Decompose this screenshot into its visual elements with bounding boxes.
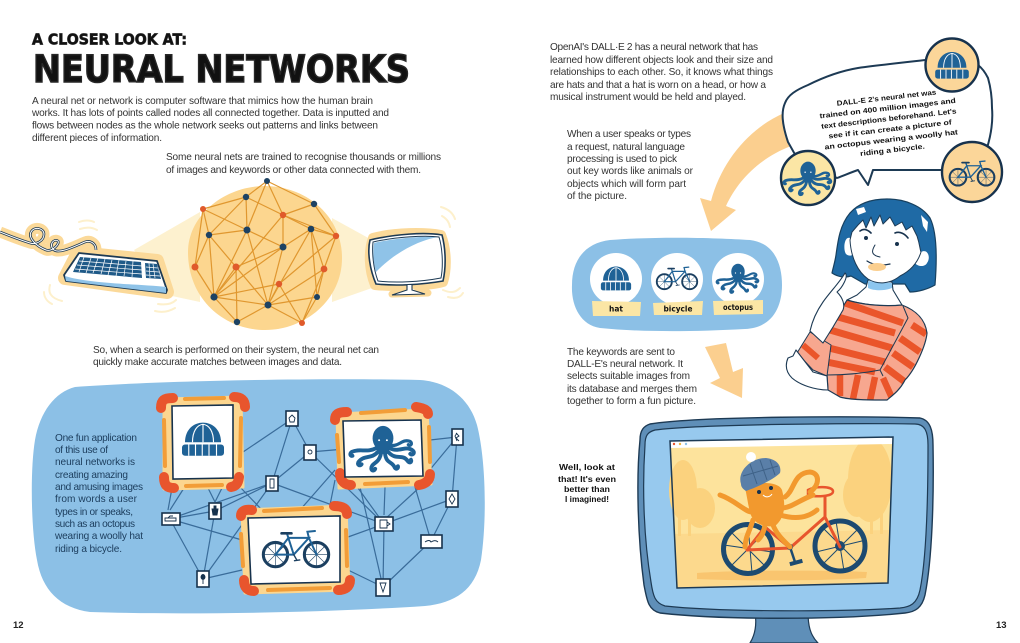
text block: fun application: such as an octopus <box>55 519 135 530</box>
bubble text: trained on 400 million images and <box>819 96 956 120</box>
speech bubble <box>781 38 1002 205</box>
hair <box>832 199 936 292</box>
text block: DALL-E 2 intro: are hats and that a hat is worn on a head, or how a <box>550 80 766 91</box>
panel: image network <box>32 379 485 613</box>
monitor body <box>638 417 933 618</box>
text block: fun application: neural networks is <box>55 457 135 468</box>
page number 13: 13 <box>996 620 1007 631</box>
illustration: big monitor <box>638 417 933 643</box>
text block: trained neural nets: of images and keywords or other data connected with them. <box>166 165 421 176</box>
text block: intro: A neural net or network is computer software that mimics how the human brain <box>32 96 373 107</box>
text block: keywords sent: The keywords are sent to <box>567 347 675 358</box>
panel: keywords <box>572 238 782 331</box>
bubble text <box>818 85 961 162</box>
text block: DALL-E 2 intro <box>550 42 773 103</box>
keyword: bicycle: bicycle <box>664 304 693 314</box>
bicycle frame <box>747 487 840 550</box>
text block: intro <box>31 96 389 144</box>
text block: trained neural nets: Some neural nets are trained to recognise thousands or millions <box>166 152 441 163</box>
icon: bicycle circle <box>942 142 1002 202</box>
text block: natural language processing: processing is used to pick <box>567 154 678 165</box>
text block: fun application <box>54 433 143 555</box>
frame: bicycle <box>241 506 350 593</box>
sweater <box>815 300 927 401</box>
neural net circle <box>188 178 342 330</box>
text block: keywords sent: selects suitable images from <box>567 371 690 382</box>
heading: a closer look at: A CLOSER LOOK AT: <box>32 30 187 48</box>
bubble text: text descriptions beforehand. Let's <box>821 106 957 131</box>
text block: intro: works. It has lots of points called nodes all connected together. Data is inputted and <box>31 108 389 119</box>
text block: DALL-E 2 intro: musical instrument would be held and played. <box>550 92 746 103</box>
light beams <box>134 212 372 302</box>
icon: hat circle <box>926 38 978 92</box>
text block: keywords sent: together to form a fun picture. <box>567 396 696 407</box>
bicycle wheels <box>724 521 866 574</box>
page number 12: 12 <box>13 620 24 631</box>
text block: keywords sent <box>567 347 697 407</box>
text block: fun application: riding a bicycle. <box>55 544 122 555</box>
character: girl thinking <box>786 199 936 401</box>
arrow: bubble to keywords <box>700 113 791 231</box>
keyword: hat: hat <box>609 304 623 314</box>
ears <box>844 238 929 266</box>
hair highlights <box>856 207 928 232</box>
features <box>860 230 908 265</box>
text block: fun application: and amusing images <box>55 482 143 493</box>
keyword: bicycle <box>651 253 703 315</box>
text block: search: quickly make accurate matches between images and data. <box>93 357 342 368</box>
keyboard with cable <box>0 228 167 293</box>
text block: fun application: One fun application <box>55 433 137 444</box>
keyword: hat <box>590 253 642 316</box>
speech: well, look at that: Well, look at <box>559 463 615 472</box>
bubble text: DALL-E 2's neural net was <box>836 88 937 108</box>
text block: search <box>93 345 379 368</box>
speech: well, look at that <box>558 463 616 504</box>
screen picture <box>669 437 893 588</box>
small icon nodes <box>162 411 463 596</box>
face <box>850 215 921 283</box>
speech: well, look at that: better than <box>564 485 610 494</box>
forearm sleeve <box>797 332 831 376</box>
title: neural networks: NEURAL NETWORKS <box>33 48 410 91</box>
text block: natural language processing: of the picture. <box>567 191 627 202</box>
text block: natural language processing: objects which will form part <box>567 179 686 190</box>
speech: well, look at that: I imagined! <box>565 495 609 504</box>
small monitor <box>369 233 446 295</box>
hands <box>786 273 846 390</box>
motion marks <box>44 207 463 312</box>
bubble text: see if it can create a picture of <box>828 117 953 140</box>
text block: natural language processing: When a user speaks or types <box>567 129 691 140</box>
text block: natural language processing <box>567 129 694 202</box>
neck <box>847 280 902 306</box>
octopus rider <box>720 452 818 547</box>
frame: octopus <box>335 407 431 488</box>
text block: DALL-E 2 intro: learned how different objects look and their size and <box>550 55 773 66</box>
text block: trained neural nets <box>166 152 441 176</box>
keyword: octopus <box>712 253 764 315</box>
bubble text: an octopus wearing a woolly hat <box>824 127 959 151</box>
diagram: keyboard to neural net to monitor <box>0 178 463 330</box>
network lines <box>168 419 457 587</box>
keyword: octopus: octopus <box>723 303 753 312</box>
text block: fun application: of this use of <box>55 445 108 456</box>
text block: fun application: from words a user <box>55 494 138 505</box>
arrow: keywords to monitor <box>705 343 743 398</box>
bubble text: riding a bicycle. <box>860 142 925 158</box>
text block: fun application: wearing a woolly hat <box>54 531 143 542</box>
text block: natural language processing: out key words like animals or <box>567 166 694 177</box>
frame: hat <box>161 397 245 489</box>
text block: fun application: types in or speaks, <box>55 507 133 518</box>
text block: search: So, when a search is performed on their system, the neural net can <box>93 345 379 356</box>
text block: fun application: creating amazing <box>55 470 128 481</box>
text block: intro: flows between nodes as the whole network seeks out patterns and links between <box>32 120 378 132</box>
text block: natural language processing: a request, natural language <box>567 142 685 153</box>
text block: keywords sent: its database and merges them <box>567 384 697 395</box>
text block: intro: different pieces of information. <box>32 133 162 144</box>
speech: well, look at that: that! It's even <box>558 475 616 484</box>
monitor stand <box>750 612 818 643</box>
text block: keywords sent: DALL-E's neural network. It <box>567 359 683 370</box>
icon: octopus circle <box>781 151 835 205</box>
text block: DALL-E 2 intro: relationships to each other. So, it knows what things <box>550 67 773 78</box>
text block: DALL-E 2 intro: OpenAI's DALL·E 2 has a neural network that has <box>550 42 758 53</box>
